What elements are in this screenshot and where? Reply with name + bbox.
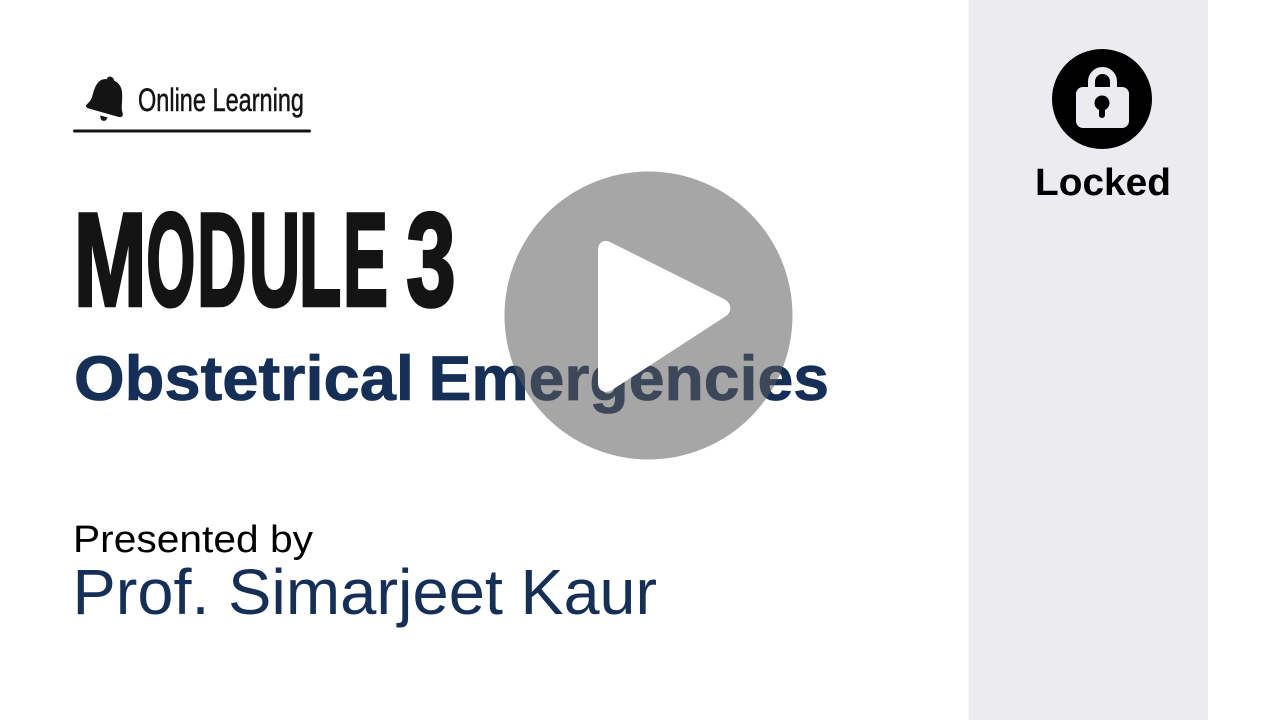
label: locked: Locked [1035,162,1171,204]
title: module 3: O [146,186,195,334]
presenter name: Simarjeet [228,556,503,628]
header: online learning [73,77,311,132]
title: module 3: L [299,186,341,334]
title: module 3: E [343,186,388,334]
panel: locked sidebar [968,0,1208,720]
icon: play button [504,172,792,460]
icon: bell [86,77,123,121]
presenter name: Prof. [72,556,210,628]
presenter name: Kaur [520,556,657,628]
title: module 3: M [74,186,147,334]
title: module 3: 3 [406,186,456,334]
title: module 3: U [249,186,300,334]
header rule [73,130,311,132]
presenter label: Presented by [73,519,313,561]
icon: padlock [1052,49,1152,149]
brand text: Online Learning [138,82,304,118]
title: module 3: D [197,186,246,334]
subtitle: Obstetrical [74,344,414,414]
subtitle: Emergencies [428,344,829,414]
